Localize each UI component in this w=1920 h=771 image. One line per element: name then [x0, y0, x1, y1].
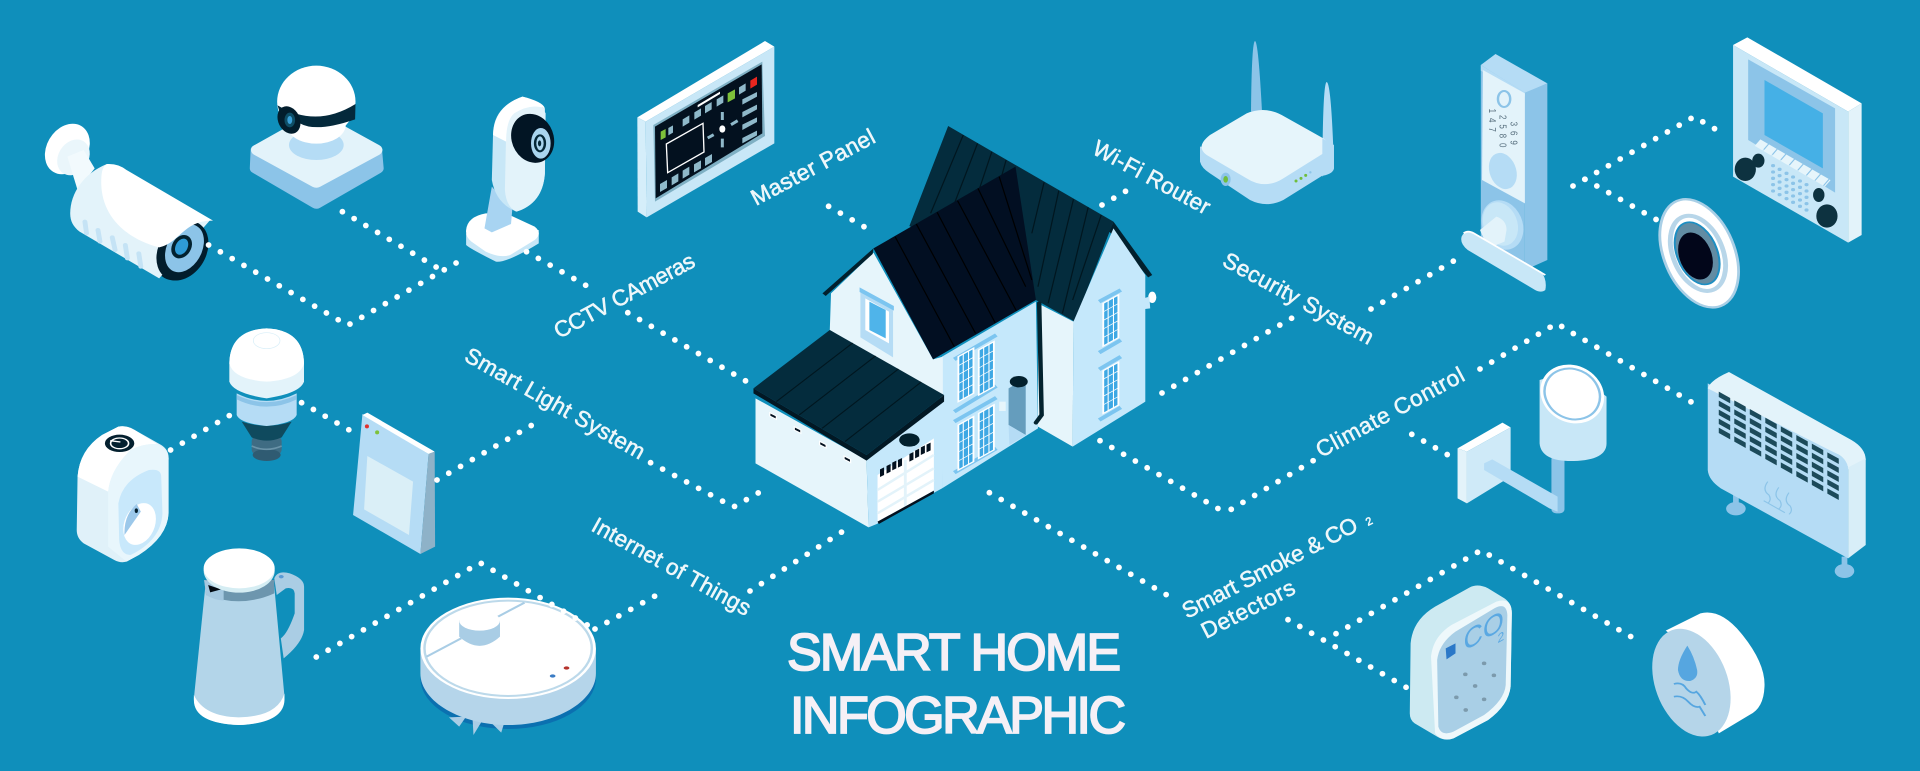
house: right wing walls	[1038, 228, 1145, 447]
house: garage walls	[756, 398, 944, 527]
icon: smart door lock: 1 4 7	[1487, 109, 1498, 133]
icon: smart door lock: 3 6 9	[1508, 122, 1519, 146]
label: Smart Smoke and CO2 Detectors: Smart Smoke & CO	[1178, 512, 1362, 623]
label: Smart Light System: Smart Light System	[461, 343, 650, 464]
house: wall camera	[1138, 292, 1156, 309]
house: rear roof	[909, 126, 1152, 322]
icon: smart kettle	[194, 548, 304, 725]
house: door and porch light	[999, 376, 1028, 445]
house: ground floor windows	[954, 290, 1121, 473]
icon: video intercom panel	[1733, 37, 1862, 243]
icon: humidity sensor	[1639, 612, 1765, 743]
house: garage door	[878, 433, 934, 524]
label: Master Panel: Master Panel	[747, 124, 879, 210]
icon: CO2 detector: CO	[1464, 604, 1504, 658]
label: Smart Smoke and CO2 Detectors: 2	[1364, 515, 1375, 529]
icon: smart door lock	[1461, 54, 1547, 292]
house: garage roof	[753, 330, 944, 461]
label: CCTV Cameras: CCTV CAmeras	[550, 248, 699, 343]
house: drain pipe	[1036, 303, 1042, 423]
icon: wi-fi router	[1200, 41, 1334, 204]
icon: smart door lock: 2 5 8 0	[1497, 115, 1508, 149]
dotted connectors	[171, 117, 1719, 691]
icon: CO2 detector	[1410, 586, 1512, 740]
label: Internet of Things: Internet of Things	[588, 513, 755, 621]
icon: robot vacuum	[420, 598, 596, 735]
label: Wi-Fi Router: Wi-Fi Router	[1089, 135, 1215, 220]
label: Security System: Security System	[1219, 247, 1378, 350]
label: Smart Smoke and CO2 Detectors: Detectors	[1197, 575, 1299, 643]
icon: CO2 detector: 2	[1498, 628, 1504, 646]
icon: smart plug	[77, 426, 169, 562]
title: INFOGRAPHIC	[790, 687, 1126, 745]
house	[753, 126, 1156, 527]
icon: dome camera on base	[256, 66, 377, 203]
house: main front wall	[942, 302, 1038, 488]
icon: smart light bulb	[229, 328, 304, 461]
icon: master control panel	[637, 41, 774, 217]
title	[787, 624, 1126, 745]
icon: wall switch	[353, 413, 435, 554]
icon: bullet CCTV camera	[37, 119, 217, 286]
title: SMART HOME	[787, 624, 1121, 682]
icon: indoor camera	[466, 97, 559, 262]
house: dormer window	[860, 287, 894, 357]
label: Climate Control: Climate Control	[1312, 362, 1469, 462]
icon: round camera sensor	[1646, 192, 1752, 315]
house: front roof	[822, 167, 1036, 359]
icon: climate wall sensor	[1458, 357, 1615, 513]
house: gable wall	[830, 253, 943, 400]
icon: panel heater	[1708, 372, 1866, 578]
